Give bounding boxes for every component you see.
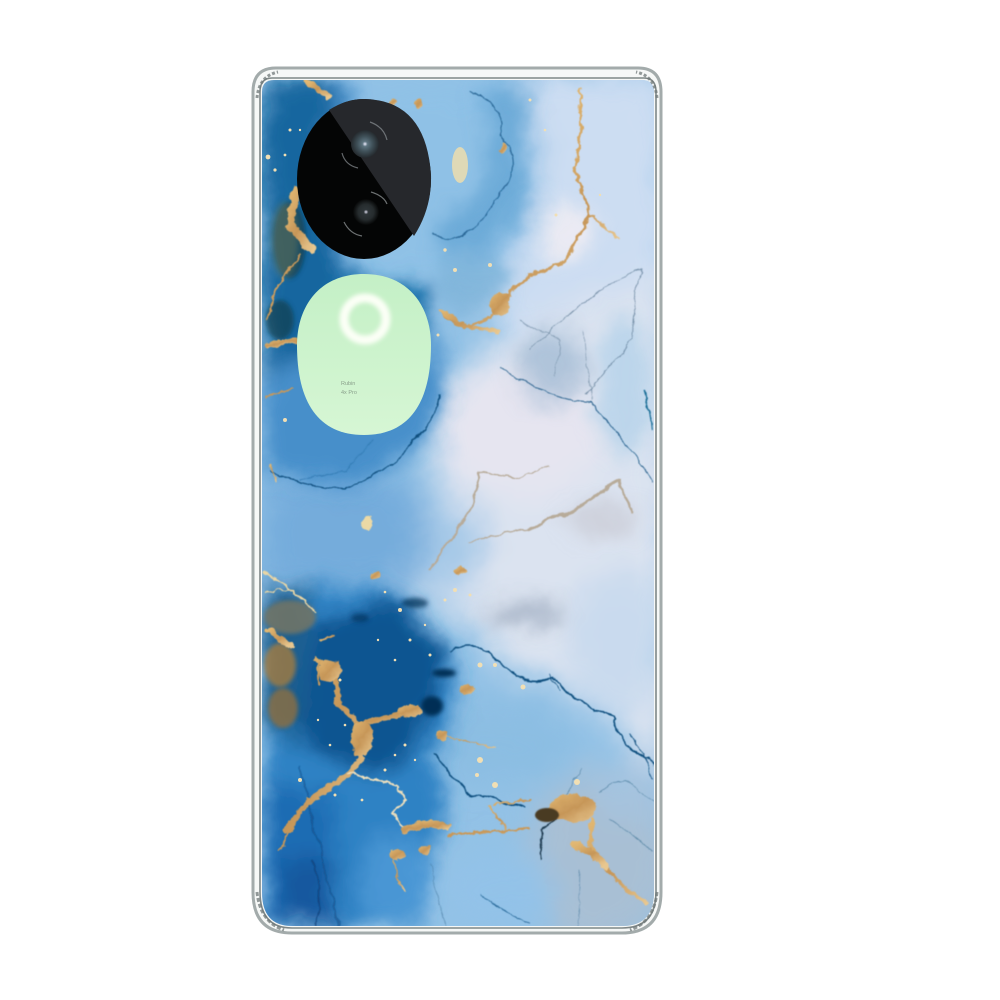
camera island bbox=[297, 99, 431, 259]
gold and white specks bbox=[266, 98, 601, 801]
dark gold patch bbox=[535, 808, 559, 822]
marble back panel bbox=[262, 70, 675, 950]
gold veins bbox=[263, 82, 647, 903]
small print: Rubin bbox=[341, 381, 355, 387]
lower lens bbox=[344, 192, 387, 236]
small print: 4x Pro bbox=[341, 390, 357, 396]
soft dark accents bbox=[266, 202, 456, 716]
dark ink veins bbox=[270, 90, 654, 926]
marble colour washes bbox=[262, 70, 675, 950]
phone case frame bbox=[253, 68, 661, 933]
grey gold veins bbox=[430, 465, 632, 570]
gold blots bbox=[319, 99, 597, 860]
bumper corners bbox=[257, 72, 657, 930]
small print bbox=[341, 381, 357, 396]
camera module bbox=[297, 99, 431, 259]
camera glare bbox=[329, 99, 431, 236]
green logo pill bbox=[297, 274, 431, 435]
flash window bbox=[452, 147, 468, 183]
brown gold stain bbox=[264, 202, 316, 728]
glowing ring bbox=[344, 298, 386, 340]
upper lens bbox=[342, 122, 387, 168]
